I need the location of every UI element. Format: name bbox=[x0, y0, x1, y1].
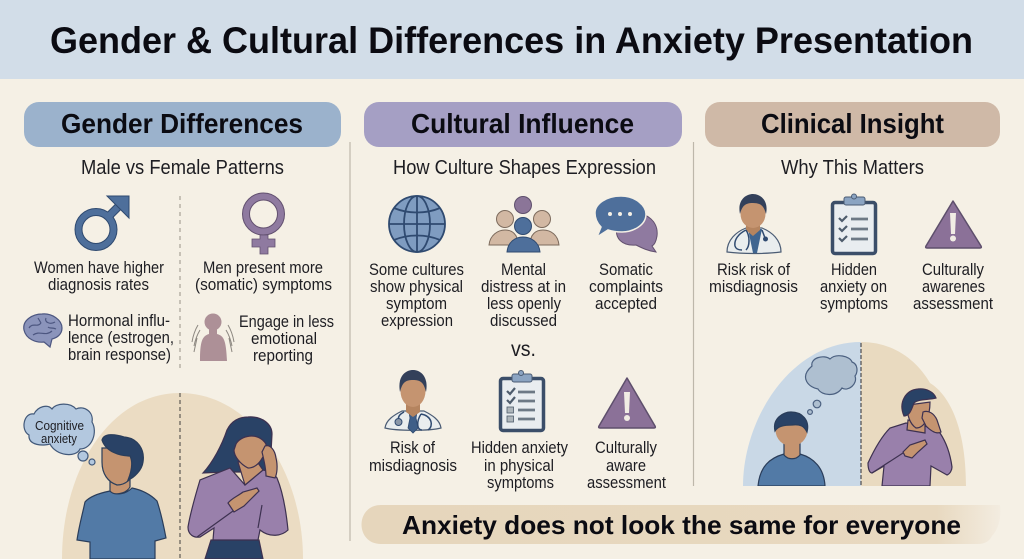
man figure with hand on chest bbox=[868, 389, 952, 486]
subheading: why this matters: Why This Matters bbox=[781, 157, 924, 179]
column dividers bbox=[350, 142, 694, 541]
text: culturally aware assessment: aware bbox=[606, 457, 646, 475]
icon: clipboard checklist bbox=[500, 370, 544, 430]
icon: doctor bbox=[385, 370, 441, 433]
heading: gender differences bbox=[24, 102, 341, 147]
text: hormonal influence: brain response) bbox=[68, 346, 171, 364]
icon: group of people bbox=[489, 196, 559, 252]
title banner bbox=[0, 0, 1024, 79]
illustration: thinking vs somatic figures bbox=[743, 342, 966, 486]
text: emotional reporting bbox=[239, 313, 334, 365]
icon: clipboard checklist bbox=[832, 194, 876, 254]
text: somatic complaints bbox=[589, 261, 663, 313]
callout text bbox=[35, 418, 84, 446]
text: culturally aware assessment bbox=[587, 439, 666, 492]
subheading: how culture shapes expression: How Culture Shapes Expression bbox=[393, 157, 656, 179]
text: culturally awareness assessment: Culturally bbox=[922, 261, 985, 279]
text: risk of misdiagnosis: Risk risk of bbox=[717, 261, 790, 279]
text: hormonal influence: lence (estrogen, bbox=[68, 329, 174, 347]
heading: gender differences: Gender Differences bbox=[61, 108, 303, 139]
text: emotional reporting: reporting bbox=[253, 347, 313, 365]
text: women diagnosis: diagnosis rates bbox=[48, 276, 149, 294]
text: emotional reporting: emotional bbox=[251, 330, 317, 348]
illustration: male and female anxiety figures bbox=[62, 393, 303, 559]
text: physical symptom expression: symptom bbox=[386, 295, 447, 313]
icon: warning triangle bbox=[599, 378, 655, 428]
text: emotional reporting: Engage in less bbox=[239, 313, 334, 331]
panel: gender differences bbox=[24, 102, 341, 559]
woman figure bbox=[188, 417, 288, 559]
icon: female symbol bbox=[246, 196, 281, 254]
text: mental distress bbox=[481, 261, 566, 330]
subheading: male vs female: Male vs Female Patterns bbox=[81, 157, 284, 179]
text: culturally aware assessment: assessment bbox=[587, 474, 666, 492]
banner text: Anxiety does not look the same for everyone bbox=[402, 510, 961, 540]
heading: cultural influence bbox=[364, 102, 682, 147]
icon: male symbol bbox=[78, 196, 129, 247]
heading: cultural influence: Cultural Influence bbox=[411, 108, 634, 139]
text: culturally awareness assessment: assessment bbox=[913, 295, 993, 313]
text: risk of misdiagnosis: misdiagnosis bbox=[709, 278, 798, 296]
text: hormonal influence: Hormonal influ- bbox=[68, 312, 170, 330]
text: mental distress: discussed bbox=[490, 312, 557, 330]
thought cloud bbox=[806, 356, 857, 394]
text: somatic complaints: Somatic bbox=[599, 261, 653, 279]
text: culturally aware assessment: Culturally bbox=[595, 439, 658, 457]
icon: body with tension lines bbox=[192, 314, 234, 361]
callout: cognitive anxiety thought bubble bbox=[24, 404, 95, 465]
text: somatic complaints: accepted bbox=[595, 295, 657, 313]
text: physical symptom expression: expression bbox=[381, 312, 453, 330]
text: mental distress: Mental bbox=[501, 261, 546, 279]
text: risk of misdiagnosis bbox=[709, 261, 798, 296]
text: risk of misdiagnosis: Risk of bbox=[390, 439, 435, 457]
text: men somatic: (somatic) symptoms bbox=[195, 276, 332, 294]
text: women diagnosis: Women have higher bbox=[34, 259, 165, 277]
text: somatic complaints: complaints bbox=[589, 278, 663, 296]
boy figure bbox=[758, 412, 825, 486]
icon: globe bbox=[389, 196, 445, 252]
text: hidden anxiety: Hidden anxiety bbox=[471, 439, 569, 457]
heading: clinical insight: Clinical Insight bbox=[761, 108, 944, 139]
icon: brain bbox=[24, 314, 62, 347]
text: hidden anxiety: in physical bbox=[484, 457, 554, 475]
icon: speech bubbles bbox=[595, 196, 657, 252]
text: physical symptom expression: show physical bbox=[370, 278, 463, 296]
title: Gender & Cultural Differences in Anxiety Presentation bbox=[50, 19, 973, 61]
text: physical symptom expression bbox=[369, 261, 464, 330]
text: men somatic bbox=[195, 259, 332, 294]
text: hidden anxiety on symptoms: anxiety on bbox=[820, 278, 887, 296]
text: risk of misdiagnosis bbox=[369, 439, 457, 475]
text: mental distress: less openly bbox=[487, 295, 562, 313]
text: hidden anxiety bbox=[471, 439, 569, 492]
text: hormonal influence bbox=[68, 312, 174, 364]
man figure bbox=[77, 435, 166, 559]
callout text: Cognitive bbox=[35, 418, 84, 433]
text: vs: vs. bbox=[511, 338, 536, 361]
text: hidden anxiety on symptoms bbox=[820, 261, 888, 313]
text: culturally awareness assessment: awarenes bbox=[922, 278, 985, 296]
text: women diagnosis bbox=[34, 259, 165, 294]
banner: key message bbox=[362, 505, 1000, 544]
heading: clinical insight bbox=[705, 102, 1000, 147]
text: risk of misdiagnosis: misdiagnosis bbox=[369, 457, 457, 475]
panel: cultural influence bbox=[364, 102, 682, 492]
text: hidden anxiety: symptoms bbox=[487, 474, 554, 492]
text: mental distress: distress at in bbox=[481, 278, 566, 296]
icon: warning triangle bbox=[926, 201, 981, 248]
text: men somatic: Men present more bbox=[203, 259, 323, 277]
text: hidden anxiety on symptoms: Hidden bbox=[831, 261, 877, 279]
text: hidden anxiety on symptoms: symptoms bbox=[820, 295, 888, 313]
icon: doctor bbox=[727, 194, 781, 254]
callout text: anxiety bbox=[41, 431, 77, 446]
text: physical symptom expression: Some cultures bbox=[369, 261, 464, 279]
text: culturally awareness assessment bbox=[913, 261, 993, 313]
dashed divider bbox=[179, 196, 181, 372]
panel: clinical insight bbox=[705, 102, 1000, 486]
